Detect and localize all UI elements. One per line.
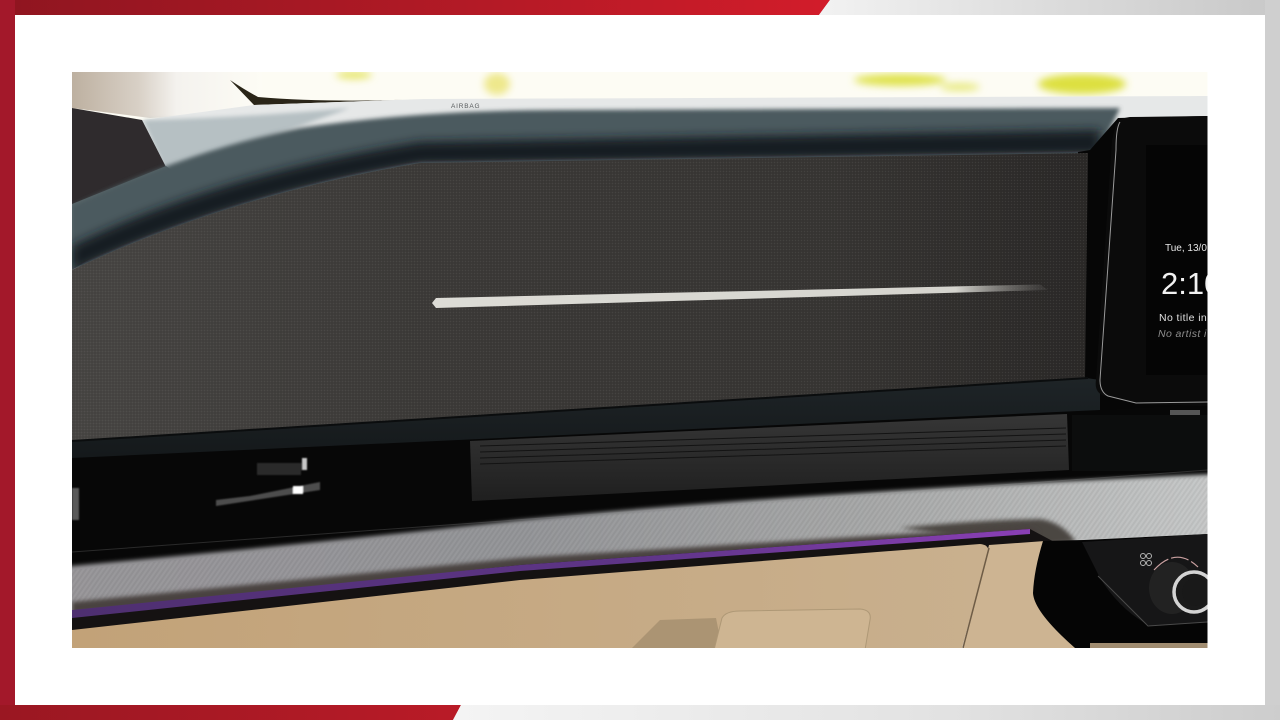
frame: top red bar (0, 0, 830, 15)
recess lower line (72, 470, 1208, 552)
leather shadowed lower part (72, 130, 1100, 272)
yellow foliage reflections (336, 71, 1126, 95)
beige side panel (963, 541, 1075, 648)
screen artist: No artist i (1158, 328, 1207, 340)
frame: right grey bar (1265, 0, 1280, 720)
silver accent strip (432, 284, 1048, 308)
ribbed storage panel (470, 414, 1069, 501)
dark windscreen edge (230, 80, 400, 105)
leather base under left end (72, 166, 169, 270)
vent lever (72, 458, 320, 520)
frame: left red bar (0, 0, 15, 720)
fan icon (1140, 554, 1152, 566)
climate control panel (1033, 534, 1214, 648)
cream pillar (72, 72, 194, 118)
silver trim (60, 474, 1220, 620)
beige glovebox lid (72, 544, 988, 648)
glovebox handle (714, 609, 870, 650)
black recess (72, 410, 1100, 570)
blue-grey dash surface (143, 108, 350, 170)
soft shadow above purple line (72, 530, 964, 610)
screen clock: 2:10 (1161, 266, 1221, 301)
lower trim band (72, 378, 1100, 462)
leather upper band (72, 108, 1120, 270)
lower screen mount detail (1170, 410, 1200, 415)
right recess detail (1072, 415, 1208, 471)
rotary knob (1149, 562, 1189, 614)
purple ambient light (72, 529, 1030, 618)
frame: bottom red bar (0, 705, 461, 720)
dark seam under purple line (72, 529, 1060, 632)
screen track title: No title in (1159, 312, 1207, 324)
dark side vent (72, 108, 166, 210)
windscreen background (80, 72, 1208, 120)
glovebox handle recess (632, 618, 722, 648)
black backing behind screen (1078, 116, 1206, 410)
light dash top (142, 96, 1208, 144)
frame: bottom grey bar (453, 705, 1280, 720)
fabric panel (72, 153, 1088, 441)
frame: top grey bar (819, 0, 1280, 15)
infotainment screen (1096, 116, 1208, 404)
lid gap (963, 548, 989, 648)
dial scale (1154, 557, 1198, 570)
screen date: Tue, 13/0 (1165, 243, 1207, 254)
photo of dashboard (60, 71, 1221, 650)
airbag embossed text: AIRBAG (451, 103, 480, 110)
dark corner of trim (900, 519, 1076, 546)
